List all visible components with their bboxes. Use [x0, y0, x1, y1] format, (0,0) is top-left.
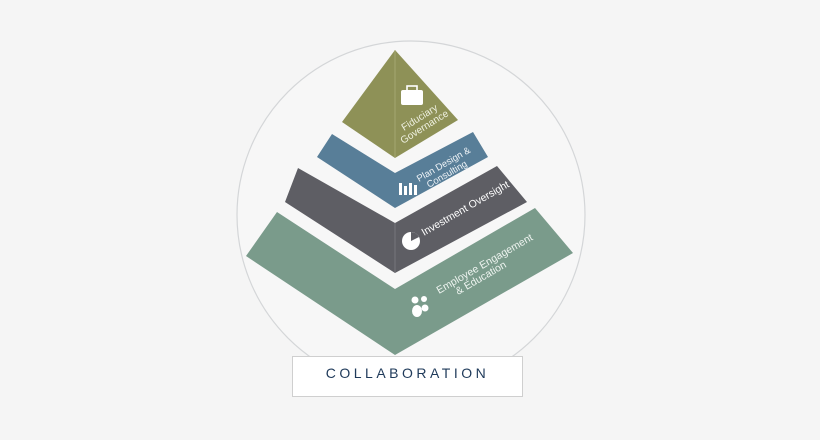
icon: pie chart [402, 232, 420, 250]
layer: employee engagement & education [246, 208, 573, 355]
layer: investment oversight [285, 166, 527, 273]
layer: plan design & consulting [317, 132, 488, 208]
icon: bar chart [399, 183, 417, 195]
collaboration box: COLLABORATION [326, 365, 489, 381]
icon: briefcase [401, 86, 423, 105]
layer: fiduciary governance: Fiduciary [400, 103, 440, 134]
background circle [237, 41, 585, 389]
layer: plan design & consulting: Plan Design & [415, 145, 473, 185]
layer: investment oversight: Investment Oversight [420, 179, 511, 239]
icon: people [412, 296, 428, 317]
layer: plan design & consulting: Consulting [425, 159, 469, 191]
layer: employee engagement & education: Employee Engagement [434, 232, 535, 297]
collaboration box [292, 356, 523, 397]
layer: fiduciary governance: Governance [399, 108, 451, 147]
layer: employee engagement & education: & Education [454, 259, 509, 298]
layer: fiduciary governance [342, 50, 458, 158]
